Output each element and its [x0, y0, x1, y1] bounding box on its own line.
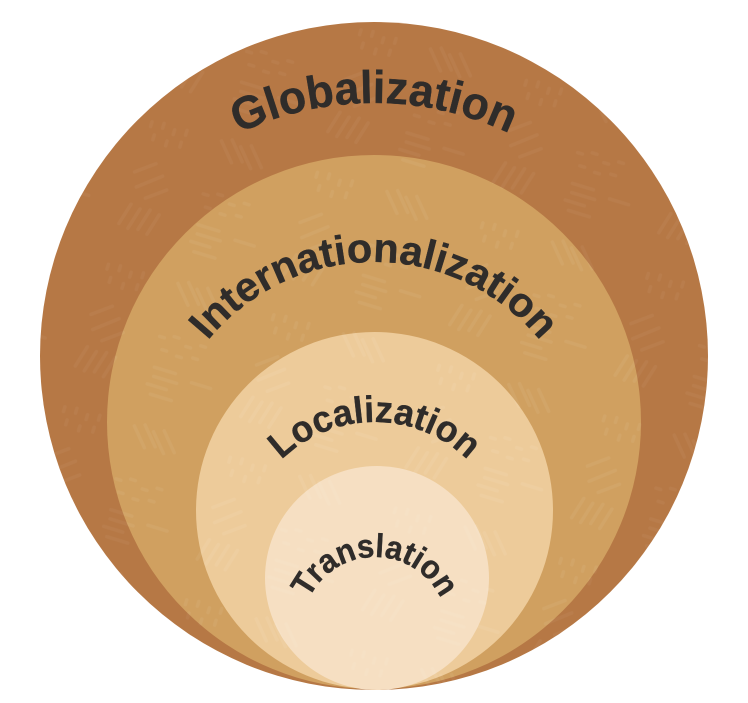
label: Translation: Translation: [289, 532, 454, 597]
label: Globalization: Globalization: [232, 69, 514, 132]
label: Internationalization: Internationalization: [188, 234, 552, 339]
label: Localization: Localization: [266, 395, 477, 458]
circle: Translation: [265, 466, 489, 690]
circle: Localization: [196, 332, 553, 688]
